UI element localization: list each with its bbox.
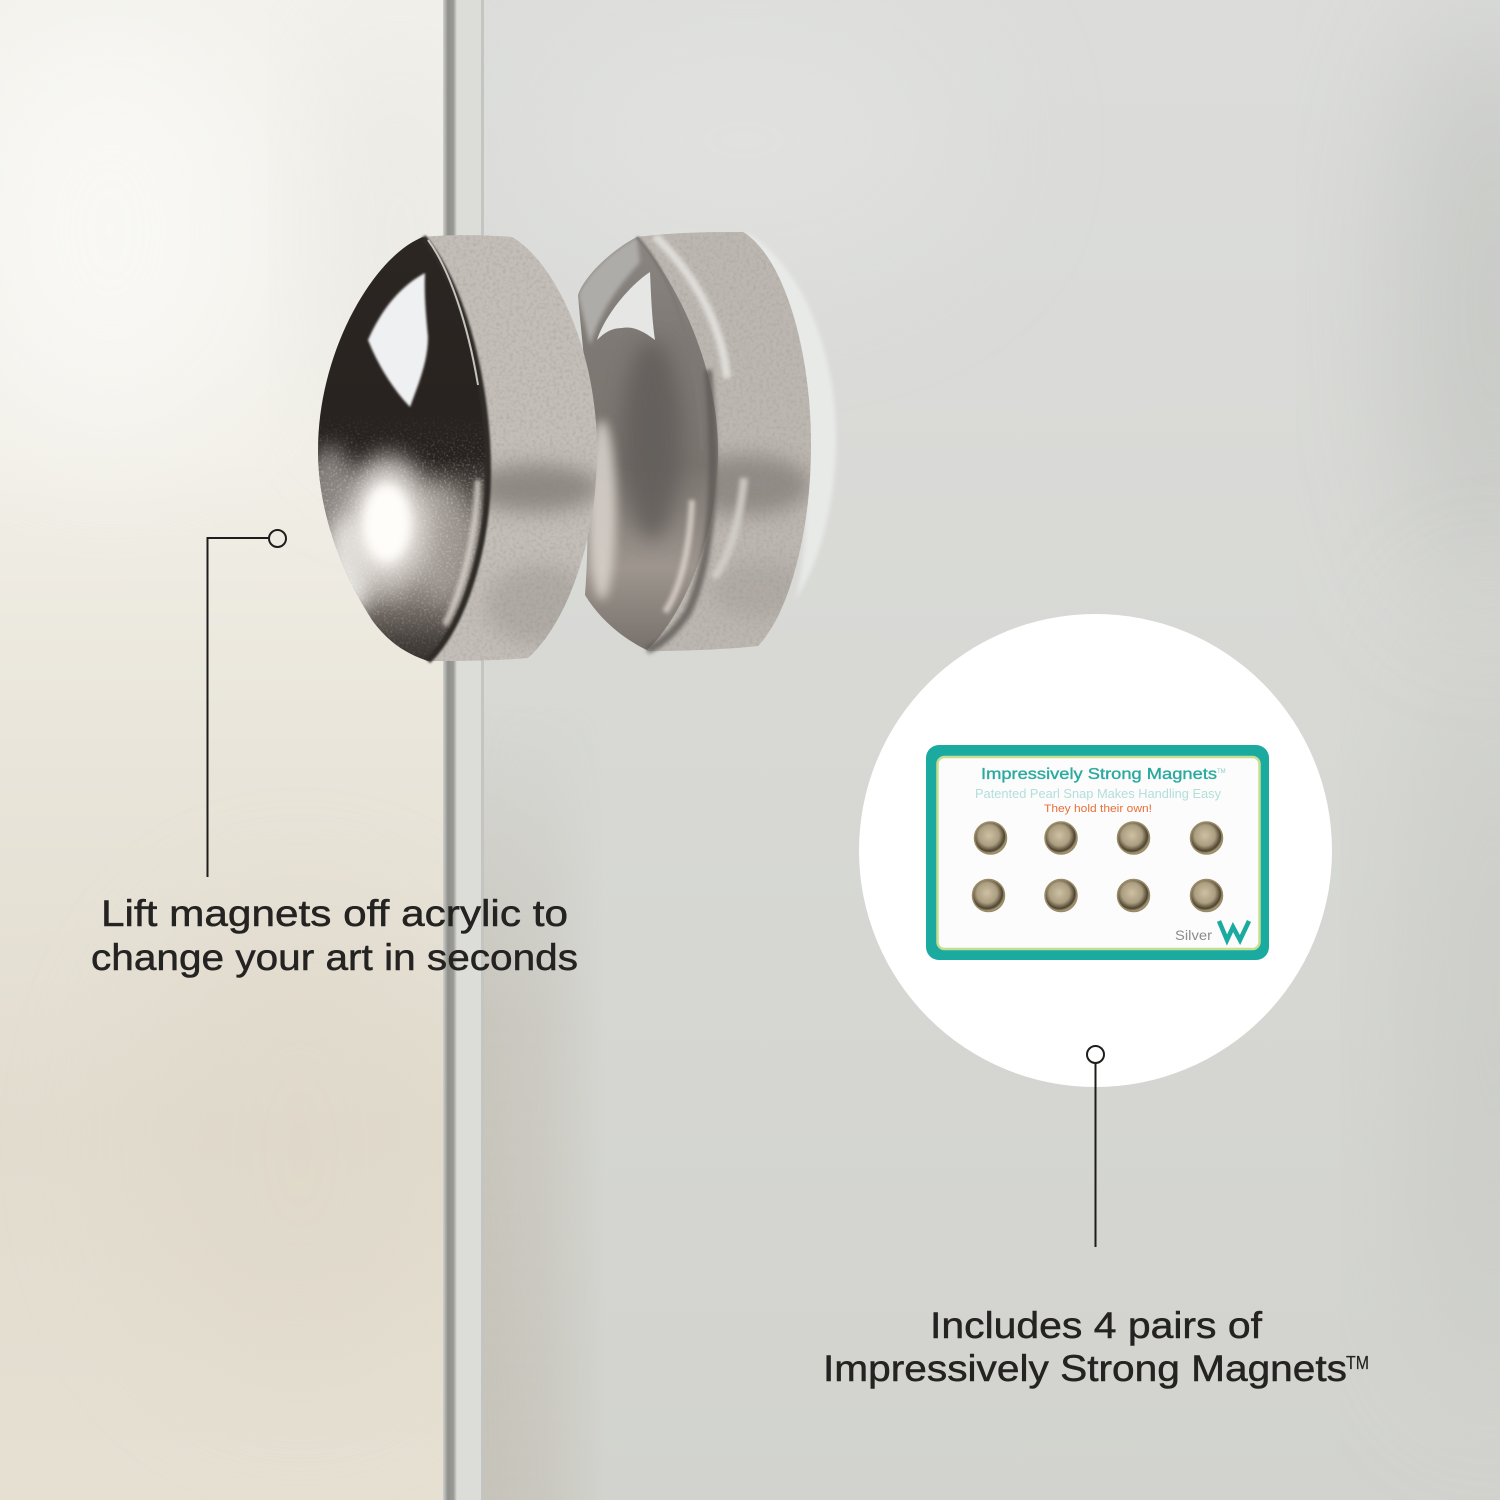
card brand mark: Silver bbox=[1175, 928, 1213, 943]
caption text bbox=[91, 893, 578, 978]
product card bbox=[926, 745, 1269, 960]
body bbox=[620, 232, 811, 651]
rim band bbox=[637, 237, 702, 450]
glass halo bbox=[745, 232, 836, 600]
body bbox=[423, 235, 597, 661]
caption text: TM bbox=[1346, 1353, 1369, 1373]
reflection highlight bbox=[597, 272, 655, 340]
magnet grid bbox=[972, 822, 1222, 912]
face bbox=[318, 237, 487, 661]
panel: white product circle bbox=[859, 614, 1332, 1087]
face bbox=[578, 237, 718, 650]
card trademark: TM bbox=[1217, 769, 1226, 775]
leader line with dot bbox=[208, 530, 286, 877]
rim bbox=[423, 237, 488, 661]
callout: lift magnets bbox=[91, 530, 578, 978]
glass band bbox=[655, 236, 727, 378]
card brand mark bbox=[1175, 921, 1249, 943]
caption text: Lift magnets off acrylic to bbox=[101, 893, 568, 934]
caption text: change your art in seconds bbox=[91, 937, 578, 978]
caption text: Impressively Strong Magnets bbox=[823, 1348, 1347, 1389]
card title: Impressively Strong Magnets bbox=[981, 766, 1217, 783]
card subtitle: Patented Pearl Snap Makes Handling Easy bbox=[975, 786, 1221, 801]
caption text bbox=[823, 1305, 1369, 1389]
card tagline: They hold their own! bbox=[1044, 803, 1152, 815]
caption text: Includes 4 pairs of bbox=[930, 1305, 1263, 1346]
back magnet behind acrylic bbox=[578, 225, 836, 655]
leader line with dot bbox=[1087, 1046, 1104, 1247]
callout: includes 4 pairs bbox=[823, 1046, 1369, 1389]
reflection highlight bbox=[368, 273, 428, 407]
front magnet bbox=[306, 230, 601, 665]
